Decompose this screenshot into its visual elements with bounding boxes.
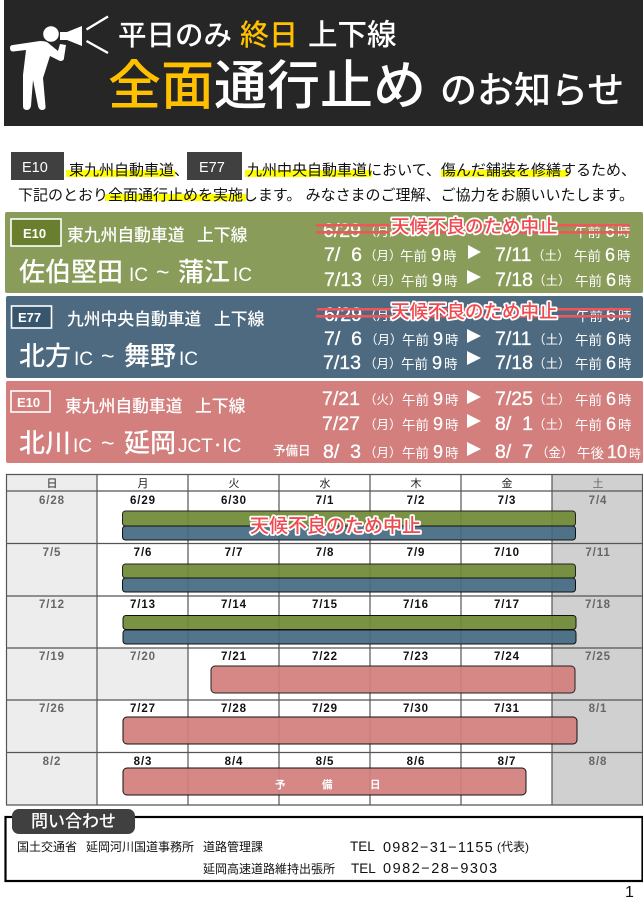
schedule rows: 10: [607, 442, 627, 462]
schedule rows: （月）: [364, 446, 402, 460]
schedule rows: 6: [606, 414, 616, 434]
schedule rows: 8/ 7: [495, 441, 533, 463]
schedule rows: 時: [445, 393, 459, 408]
schedule rows: 午前: [400, 248, 427, 264]
schedule rows: （月）: [364, 309, 402, 323]
weekday header: 日: [46, 478, 58, 490]
date numbers: 7/5: [43, 547, 61, 559]
heading line 1: [118, 19, 397, 52]
schedule rows: 9: [431, 245, 441, 265]
panel: E10 Saiki-Kamae: 蒲江: [178, 257, 230, 287]
intro text: [11, 152, 636, 204]
schedule rows: （土）: [533, 393, 571, 407]
schedule rows: 午前: [575, 332, 602, 348]
weekday header: 水: [320, 477, 330, 490]
panel: E10 Kitagawa-Nobeoka: JCT･IC: [178, 436, 241, 457]
contact row 1: [17, 839, 529, 856]
schedule rows: （月）: [364, 418, 402, 432]
date numbers: 8/2: [43, 756, 61, 768]
schedule rows: 6: [606, 329, 616, 349]
cancelled notice: 天候不良のため中止: [391, 301, 558, 322]
date numbers: 7/15: [312, 599, 338, 611]
date numbers: 7/10: [494, 547, 520, 559]
weekday header: 金: [502, 477, 512, 490]
reserve bar 8/3: 日: [370, 779, 380, 791]
closure bars week of 7/6: [122, 564, 576, 592]
schedule rows: 9: [433, 329, 443, 349]
schedule rows: 6: [606, 305, 616, 325]
date numbers: 7/2: [407, 495, 425, 507]
contact row 2: [203, 861, 499, 877]
schedule rows: 7/13: [323, 352, 361, 374]
schedule rows: 午前: [402, 417, 429, 433]
schedule rows: （火）: [364, 393, 402, 407]
date numbers: 7/27: [130, 703, 156, 715]
panel: E77 Kitakata-Maino: IC: [74, 349, 93, 370]
schedule rows: 午前: [575, 392, 602, 408]
schedule rows: [322, 388, 641, 463]
schedule rows: 時: [618, 309, 632, 324]
panel: E10 Kitagawa-Nobeoka: [6, 381, 643, 463]
schedule rows: 8/ 1: [495, 413, 533, 435]
schedule rows: 午前: [576, 308, 603, 324]
schedule rows: （金）: [536, 446, 574, 460]
date numbers: 7/29: [312, 703, 338, 715]
panel: E77 Kitakata-Maino: 舞野: [124, 341, 176, 371]
heading line 1: 上下線: [308, 19, 397, 52]
schedule rows: （月）: [364, 274, 402, 288]
date numbers: 7/11: [585, 547, 611, 559]
weekday header: 月: [138, 478, 148, 490]
closure bars week of 7/13: [123, 616, 576, 644]
schedule rows: 時: [445, 418, 459, 433]
date numbers: 7/6: [134, 547, 152, 559]
schedule rows: 午前: [401, 356, 428, 372]
panel: contact: [6, 809, 642, 881]
date numbers: 7/26: [39, 703, 65, 715]
schedule rows: 6: [606, 389, 616, 409]
date numbers: 8/7: [498, 756, 516, 768]
contact row 2: TEL: [351, 861, 376, 876]
schedule rows: 7/21: [322, 388, 360, 410]
schedule rows: 午後: [577, 446, 604, 461]
weekday header: 土: [592, 477, 604, 490]
schedule rows: 時: [443, 249, 457, 264]
date numbers: 7/3: [498, 495, 516, 507]
date numbers: 7/18: [585, 599, 611, 611]
intro text: 下記のとおり全面通行止めを実施します。 みなさまのご理解、ご協力をお願いいたします。: [18, 187, 634, 204]
schedule rows: 時: [618, 274, 632, 289]
panel: E77 Kitakata-Maino: 北方: [19, 341, 71, 371]
panel: E10 Saiki-Kamae: IC: [129, 265, 148, 286]
contact row 1: 0982−31−1155: [383, 840, 494, 856]
schedule rows: （土）: [533, 418, 571, 432]
schedule rows: [323, 304, 632, 374]
schedule rows: 6: [606, 270, 616, 290]
schedule rows: （土）: [533, 333, 571, 347]
schedule rows: 6/29: [324, 304, 362, 326]
schedule rows: （土）: [533, 357, 571, 371]
schedule rows: （月）: [365, 333, 403, 347]
date numbers: 7/31: [494, 703, 520, 715]
date numbers: 7/9: [407, 547, 425, 559]
weekday header: [46, 477, 604, 490]
route badge: [12, 306, 52, 328]
contact row 1: 道路管理課: [203, 839, 263, 854]
reserve bar 8/3: 予: [275, 779, 286, 791]
schedule rows: 時: [444, 274, 458, 289]
panel: E77 Kitakata-Maino: 九州中央自動車道: [67, 310, 201, 329]
schedule rows: 時: [444, 357, 458, 372]
date numbers: 8/4: [225, 756, 243, 768]
schedule rows: （月）: [364, 357, 402, 371]
schedule rows: 午前: [574, 224, 601, 240]
date numbers: 8/1: [589, 703, 607, 715]
closure bar 7/27: [123, 717, 577, 744]
schedule rows: 時: [618, 357, 632, 372]
schedule rows: 時: [617, 249, 631, 264]
reserve bar 8/3: 備: [322, 778, 333, 791]
heading line 2: 全面通行止め: [108, 57, 426, 116]
calendar: [6, 474, 643, 805]
date numbers: 7/17: [494, 599, 520, 611]
route badge: E10: [23, 226, 46, 241]
schedule rows: 7/27: [322, 413, 360, 435]
contact heading: 問い合わせ: [31, 812, 116, 831]
schedule rows: （月）: [364, 225, 402, 239]
panel: E10 Saiki-Kamae: ~: [156, 259, 169, 285]
schedule rows: 時: [618, 393, 632, 408]
schedule rows: 時: [445, 446, 459, 461]
schedule rows: 6/29: [323, 220, 361, 242]
schedule rows: [323, 220, 632, 291]
heading suffix: のお知らせ: [440, 70, 624, 111]
schedule rows: 7/13: [324, 269, 362, 291]
schedule rows: 9: [433, 389, 443, 409]
schedule rows: 午前: [575, 417, 602, 433]
header banner: [4, 0, 643, 126]
route badge: E77: [18, 310, 41, 325]
cancelled notice: 天候不良のため中止: [391, 216, 558, 237]
schedule rows: 午前: [402, 445, 429, 461]
reserve bar 8/3: [123, 768, 526, 795]
schedule rows: 7/18: [495, 352, 533, 374]
intro text: 九州中央自動車道において、傷んだ舗装を修繕するため、: [247, 162, 636, 179]
schedule rows: 午前: [574, 248, 601, 264]
contact row 2: 延岡高速道路維持出張所: [203, 861, 335, 876]
date numbers: 7/13: [130, 599, 156, 611]
panel: E10 Saiki-Kamae: 東九州自動車道: [67, 226, 185, 245]
schedule rows: （土）: [533, 274, 571, 288]
schedule rows: 午前: [575, 273, 602, 289]
weekday header: 木: [410, 477, 422, 490]
schedule rows: 7/18: [495, 269, 533, 291]
weekday header: 火: [228, 478, 240, 490]
route badge: E10: [17, 395, 40, 410]
calendar shading: [6, 474, 643, 805]
date numbers: 8/5: [316, 756, 334, 768]
date numbers: 6/28: [39, 495, 65, 507]
closure bar 7/21: [211, 666, 575, 693]
schedule rows: 時: [617, 225, 631, 240]
schedule rows: 午前: [575, 356, 602, 372]
schedule rows: 7/ 6: [324, 328, 362, 350]
panel: E77 Kitakata-Maino: 上下線: [214, 310, 265, 329]
contact row 1: 国土交通省: [17, 840, 77, 854]
reserve day label: 予備日: [273, 443, 311, 458]
panel: E77 Kitakata-Maino: ~: [101, 343, 114, 369]
schedule rows: 時: [445, 333, 459, 348]
contact row 2: 0982−28−9303: [383, 861, 499, 877]
date numbers: 7/7: [225, 547, 243, 559]
schedule rows: 9: [433, 414, 443, 434]
panel: E77 Kitakata-Maino: IC: [179, 349, 198, 370]
intro text: E10: [22, 160, 48, 176]
date numbers: 7/8: [316, 547, 334, 559]
panel: E10 Saiki-Kamae: IC: [233, 265, 252, 286]
date numbers: [39, 495, 611, 768]
schedule rows: （月）: [364, 249, 402, 263]
schedule rows: 時: [618, 418, 632, 433]
schedule rows: 7/11: [495, 244, 532, 266]
date numbers: 6/30: [221, 495, 247, 507]
heading line 1: 終日: [240, 19, 298, 52]
date numbers: 7/25: [585, 651, 611, 663]
panel: E10 Kitagawa-Nobeoka: ~: [101, 430, 114, 456]
panel: E77 Kitakata-Maino: [6, 296, 643, 378]
intro text: 東九州自動車道、: [69, 162, 189, 179]
panel: E10 Kitagawa-Nobeoka: 延岡: [124, 428, 176, 458]
schedule rows: 午前: [401, 273, 428, 289]
date numbers: 7/20: [130, 651, 156, 663]
schedule rows: 9: [432, 270, 442, 290]
date numbers: 7/23: [403, 651, 429, 663]
panel: E10 Saiki-Kamae: 上下線: [197, 226, 248, 245]
schedule rows: 6: [605, 221, 615, 241]
date numbers: 7/30: [403, 703, 429, 715]
heading line 1: 平日のみ: [118, 20, 232, 52]
date numbers: 7/19: [39, 651, 65, 663]
date numbers: 7/22: [312, 651, 338, 663]
route badge: [11, 391, 50, 412]
contact row 1: 延岡河川国道事務所: [86, 840, 194, 854]
date numbers: 7/12: [39, 599, 65, 611]
closure bars week of 6/29: 天候不良のため中止: [250, 515, 421, 537]
panel: E10 Kitagawa-Nobeoka: IC: [73, 436, 92, 457]
date numbers: 8/8: [589, 756, 607, 768]
panel: E10 Kitagawa-Nobeoka: 東九州自動車道: [65, 397, 183, 416]
panel: E10 Saiki-Kamae: [5, 212, 643, 293]
intro text: E77: [199, 160, 225, 176]
date numbers: 7/14: [221, 599, 247, 611]
panel: E10 Saiki-Kamae: 佐伯堅田: [19, 257, 123, 287]
panel: E10 Kitagawa-Nobeoka: 北川: [19, 428, 71, 458]
schedule rows: 6: [606, 353, 616, 373]
schedule rows: 時: [629, 447, 641, 461]
route badge: [11, 219, 61, 246]
schedule rows: 9: [433, 442, 443, 462]
schedule rows: 7/25: [495, 388, 533, 410]
date numbers: 8/6: [407, 756, 425, 768]
schedule rows: 時: [618, 333, 632, 348]
contact heading: [12, 809, 135, 834]
date numbers: 7/1: [316, 495, 334, 507]
schedule rows: 7/ 6: [324, 244, 362, 266]
date numbers: 6/29: [130, 495, 156, 507]
schedule rows: 9: [432, 353, 442, 373]
date numbers: 7/24: [494, 651, 520, 663]
date numbers: 7/28: [221, 703, 247, 715]
date numbers: 7/4: [589, 495, 607, 507]
date numbers: 7/16: [403, 599, 429, 611]
schedule rows: 7/11: [495, 328, 532, 350]
icon: person with megaphone: [10, 16, 108, 110]
schedule rows: 8/ 3: [323, 441, 361, 463]
closure bars week of 6/29: [122, 511, 576, 540]
contact row 1: TEL: [350, 839, 375, 854]
contact row 1: (代表): [497, 840, 529, 854]
schedule rows: 午前: [402, 392, 429, 408]
date numbers: 8/3: [134, 756, 152, 768]
schedule rows: 6: [605, 245, 615, 265]
date numbers: 7/21: [221, 651, 247, 663]
panel: E10 Kitagawa-Nobeoka: 上下線: [195, 397, 246, 416]
schedule rows: （土）: [532, 249, 570, 263]
schedule rows: 午前: [402, 332, 429, 348]
